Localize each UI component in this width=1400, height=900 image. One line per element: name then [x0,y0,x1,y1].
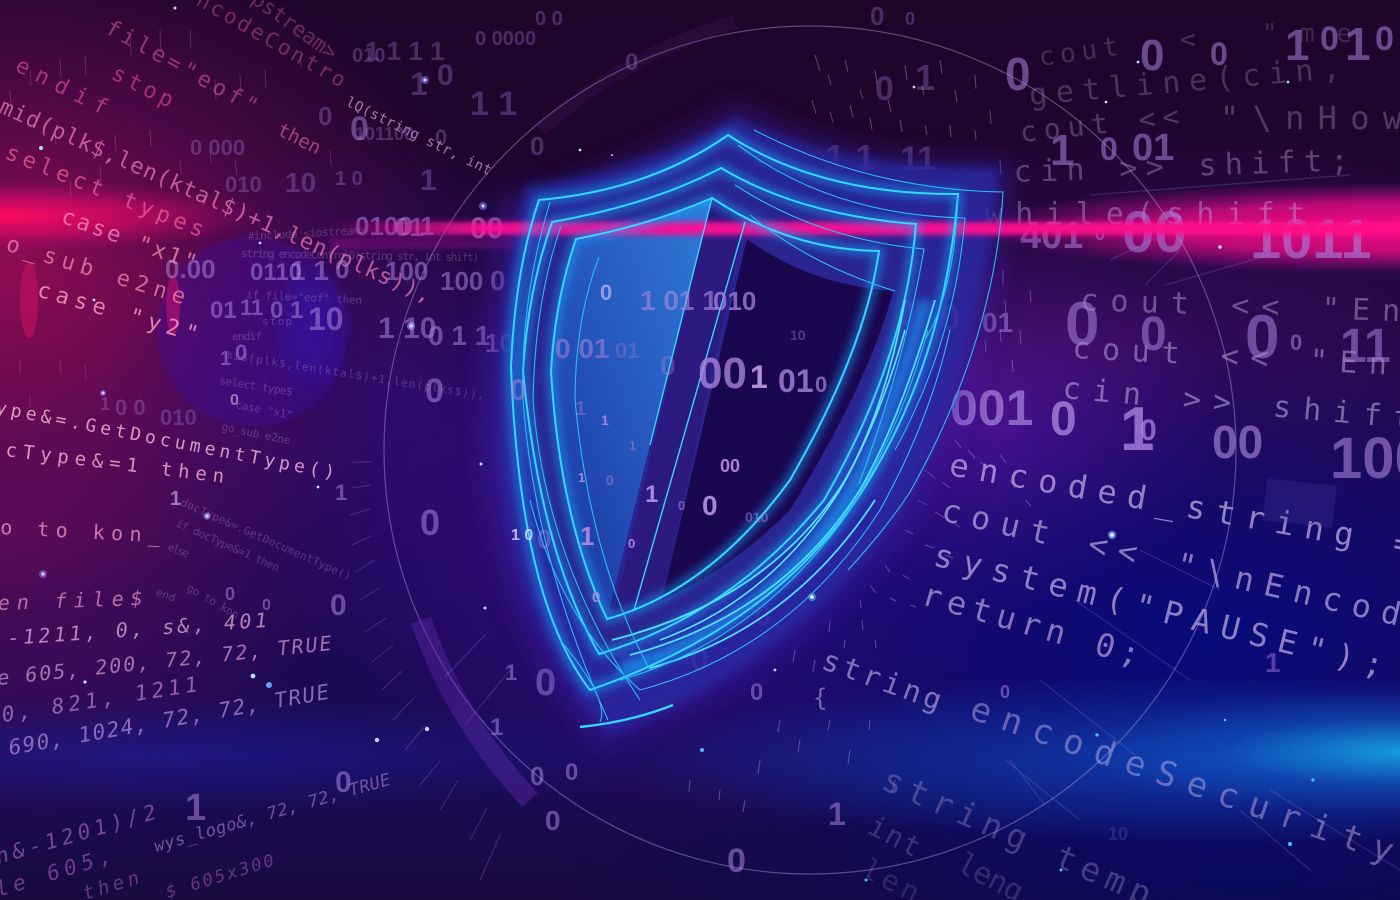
faint code block [154,224,485,622]
shield halo [498,118,998,735]
shield inner digits: 010 [713,286,756,316]
code text: right side: < [1180,25,1196,55]
shield [330,100,1400,750]
binary digits background: 10 [1108,824,1128,844]
code text: left side: select types [2,140,208,243]
bright white digits: 0 [628,536,635,551]
binary digits background: 0 [437,59,454,92]
binary digits background: 0 [625,49,638,76]
binary digits background: 0 [750,679,763,706]
faint code block: case "x1" [234,398,294,422]
faint code block: docType&=.GetDocumentType() [179,496,353,583]
binary digits background: 101100 [355,124,414,144]
binary digits background: 100 [440,266,483,296]
shield inner digits: 0 [815,372,827,397]
binary digits background: 0 [1375,20,1394,58]
code text: left side: -1211, 0, s&, 401 [7,608,268,650]
binary digits background: 0 [1140,31,1164,80]
binary digits background: 0 [530,131,544,161]
binary digits background: 0 [335,766,352,799]
binary digits background: 11 [240,295,263,320]
bright white digits: 1 [645,481,658,508]
binary digits background: 1 10 [378,312,436,345]
code text: right side [813,19,1400,900]
binary digits background: 0 0 [535,8,563,30]
faint code block: stop [262,315,292,328]
binary digits background: 0 [235,340,247,365]
faint code block: end [154,586,177,605]
binary digits background: 1 [220,348,231,370]
bright white digits: 0 [702,490,718,521]
binary digits background: 0 0000 [475,28,536,50]
code text: right side: { [813,684,827,712]
code text: right side: string [818,643,947,717]
binary digits background: 1 [828,796,846,832]
binary digits background: 01 [982,307,1013,338]
code text: left side: cType&=1 then [4,439,225,488]
code text: left side: o_sub e2ne [3,232,188,310]
binary digits background: 0 [225,584,235,604]
binary digits background: 01 [395,212,424,242]
binary digits background: 0 [335,254,349,284]
binary digits background: 0 [1210,36,1228,72]
faint code block: endif [232,330,262,343]
binary digits background: 0 [875,70,894,108]
binary digits background: 0 [870,1,884,31]
code text: right side: cin >> shift; [1013,143,1349,190]
falling digit streaks [10,30,1031,812]
faint code block: string encodeControl0(string str, int shift) [241,247,479,264]
binary digits background: 01 [1132,127,1174,169]
thin accent lines [523,130,1003,722]
faint code block: mid(plk$,len(ktal$)+1,len(plks$)), [225,348,485,402]
binary digits background: 0 1 1 [428,320,490,351]
code line: cout me: cout [1037,32,1120,73]
code text: right side: int [863,809,927,864]
radar ring [350,22,1400,880]
binary digits background: 1 [100,394,110,414]
binary digits background: 1 [810,287,831,329]
binary digits background: 1 1 1 1 [365,36,445,66]
binary digits background: 0 [230,392,239,409]
binary digits background: 00 [1122,200,1187,265]
shield inner digits: 1 [575,398,586,420]
shield fill band [523,168,916,654]
binary digits background: 0 [690,640,709,678]
binary digits background: 0 [727,842,746,880]
binary digits background: 0 [1290,330,1302,355]
binary digits background: 0 [435,125,447,150]
binary digits background: 0 [755,599,772,632]
binary digits background: 1 [185,787,206,829]
binary digits background: 0 [565,759,578,786]
binary digits background: 010 [160,405,197,430]
code text: left side: ype&=.GetDocumentType() [0,397,337,484]
bright white digits: 0 [592,589,600,606]
lens flare: purple disc [157,237,347,427]
bright white digits: 1 [580,521,594,551]
binary digits background: 0 [545,805,561,836]
binary digits background: 00 [1212,416,1263,468]
code text: right side: "me [1262,19,1352,49]
shield inner digits: 1 [750,359,768,395]
binary digits background: 001 [950,380,1033,436]
binary digits background: 10 [308,301,344,337]
shield inner digits: 1 01 1 [640,285,718,316]
magenta light streak: left and right glows [0,180,1400,274]
faint code block: if docType&=1 then [174,517,281,574]
binary digits background: 0 [895,292,915,333]
code text: right side: while(shift [985,197,1305,232]
binary digits background: 0 [1245,303,1279,372]
binary digits background: 010 [225,172,262,197]
bright white digits: 0 [678,498,685,513]
code text: right side: "\nHow [1220,99,1400,137]
binary digits background: 1 1 [290,255,329,286]
binary digits background: 1 [170,488,181,510]
faint code block: else [166,541,191,560]
binary digits background: 100 [385,256,428,286]
binary digits background: 010 [352,45,385,67]
shield inner digits: 0 [537,524,551,554]
code text: left side: o to kon_ [0,515,162,547]
binary digits background: 1 [1265,647,1281,678]
binary digits background: 0 [905,9,915,29]
bright white digits [578,412,769,606]
code text: right side: getline(cin, [1028,51,1342,113]
code text: left side: file="eof" [101,15,262,120]
shield left blue panel [551,198,712,619]
code text: right side: return 0; [918,575,1145,674]
binary digits background: 1 [490,714,503,741]
binary digits background: 1 [420,211,434,241]
binary digits background: 1 1 [825,137,875,178]
binary digits background: 0 [1320,20,1339,58]
cyan glow lines [511,135,958,690]
shield inner digits: 0 [600,280,612,305]
shield inner digits: 0 [660,350,676,381]
code text: right side: cout << "En [1080,283,1400,329]
code text: left side: endif [11,53,112,121]
code text: left side: 0, 821, 1211 [0,672,199,727]
shield inner digits: 0 01 [555,333,610,364]
bright white digits: 00 [720,456,740,476]
binary digits background: 1 [410,66,428,102]
cyan outline strokes [511,135,958,727]
binary digits background: 0 [1095,224,1105,244]
binary digits background: 1011 [1250,207,1372,270]
code text: left side: lQ(string str, int [343,94,494,179]
binary digits background: 1 [505,660,517,685]
binary digits background: 0 000 [190,135,245,160]
bright white digits: 0 [606,472,614,488]
shield dark window [662,239,893,600]
shield inner digits: 0 [510,374,527,407]
binary digits background: 0 [425,372,444,410]
binary digits background: 10 [285,167,316,198]
code text: left side: mid(plk$,len(ktal$)+1,len(plks)), [0,95,435,309]
binary digits background: 0 [535,662,556,704]
binary digits background: 1 [1050,126,1074,175]
code text: left side: 690, 1024, 72, 72, TRUE [7,680,331,760]
faint code block: if file="eof" then [246,288,362,307]
code text: left side: then [274,119,325,159]
bright white digits: 1 [601,412,609,428]
binary digits background: 0 [1005,48,1031,100]
binary digits background: 1 [1120,395,1154,464]
binary digits background: 1 [915,57,935,98]
code text: left side: stop [107,61,177,113]
binary digits background: 401 [1020,215,1083,257]
shield inner digits: 00 [698,349,747,398]
shield inner digits: 1 0 [511,527,533,544]
binary digits background: 1 [1345,18,1371,70]
binary digits background: 0 0 [115,395,146,420]
shield inner digits: 01 [615,338,639,363]
faint code block: go to kon [184,581,241,622]
code text: left side [0,0,494,900]
code text: right side: system("PAUSE"); [930,536,1388,685]
binary digits background: 0 [330,589,347,622]
binary digits background: 11 [845,287,887,331]
binary digits background: 0 [350,110,369,148]
code text: left side: en file$ [0,586,143,615]
binary digits background: 10 [485,328,514,358]
faint code block: #include <iostream> [247,224,366,243]
code text: right side: encodeSecurity [965,689,1399,871]
binary digits background: 1 [1285,21,1309,70]
binary digits background: 0 [940,297,960,338]
binary digits background: 0 [1140,308,1167,361]
binary digits background: 01 [210,297,237,324]
binary digits background: 1 [420,164,437,197]
binary digits background: 11 [1340,320,1391,373]
binary digits background: 1 1 [470,85,517,123]
magenta beam across shield [330,222,1400,235]
binary digits background: 0 [1065,290,1099,359]
code text: right side: cout << [1018,99,1181,149]
binary digits background: 0 [1000,682,1010,702]
binary digits background: 0 [1140,414,1157,447]
binary digits background: 0 [490,265,506,296]
code text: left side: e 605, 200, 72, 72, TRUE [0,631,333,690]
shield inner digits: 10 [790,327,806,343]
code text: left side: case "x1" [58,204,200,276]
binary digits background: 0 [262,597,271,614]
bright white digits: 010 [745,509,769,525]
code text: right side: cout << "\nEncod [938,491,1400,634]
code text: right side: cout << "En [1072,331,1388,382]
binary digits background: 11 [900,140,936,178]
binary digits background: 0100 [355,211,413,241]
binary digits background: 0 [1100,131,1118,167]
binary digits background: 0 [1050,393,1077,446]
binary digits background: 00 [470,212,503,245]
binary digits background: 0 [318,101,332,131]
decorative blocks [1263,478,1337,528]
code text: left side: wys_logo&, 72, 72, TRUE [152,770,394,857]
binary digits background: 1 0 [335,168,363,190]
faint code block: select type$ [219,374,294,399]
lens flare: pink ovals [20,262,180,338]
shield inner digits [510,280,827,554]
shield inner digits: 01 [778,363,814,399]
binary digits background: 0 [420,502,440,543]
faint code block: go_sub e2ne [220,420,292,447]
binary digits background: 0110 [250,259,302,286]
bright white digits: 1 [629,438,636,453]
binary digits background: 0 [530,761,544,791]
binary digits background: 0.00 [165,254,216,284]
code text: left side: case "y2" [34,278,201,348]
binary digits background: 0 1 [270,297,303,324]
binary digits background: 1 [335,480,347,505]
bright white digits: 1 [578,470,585,485]
